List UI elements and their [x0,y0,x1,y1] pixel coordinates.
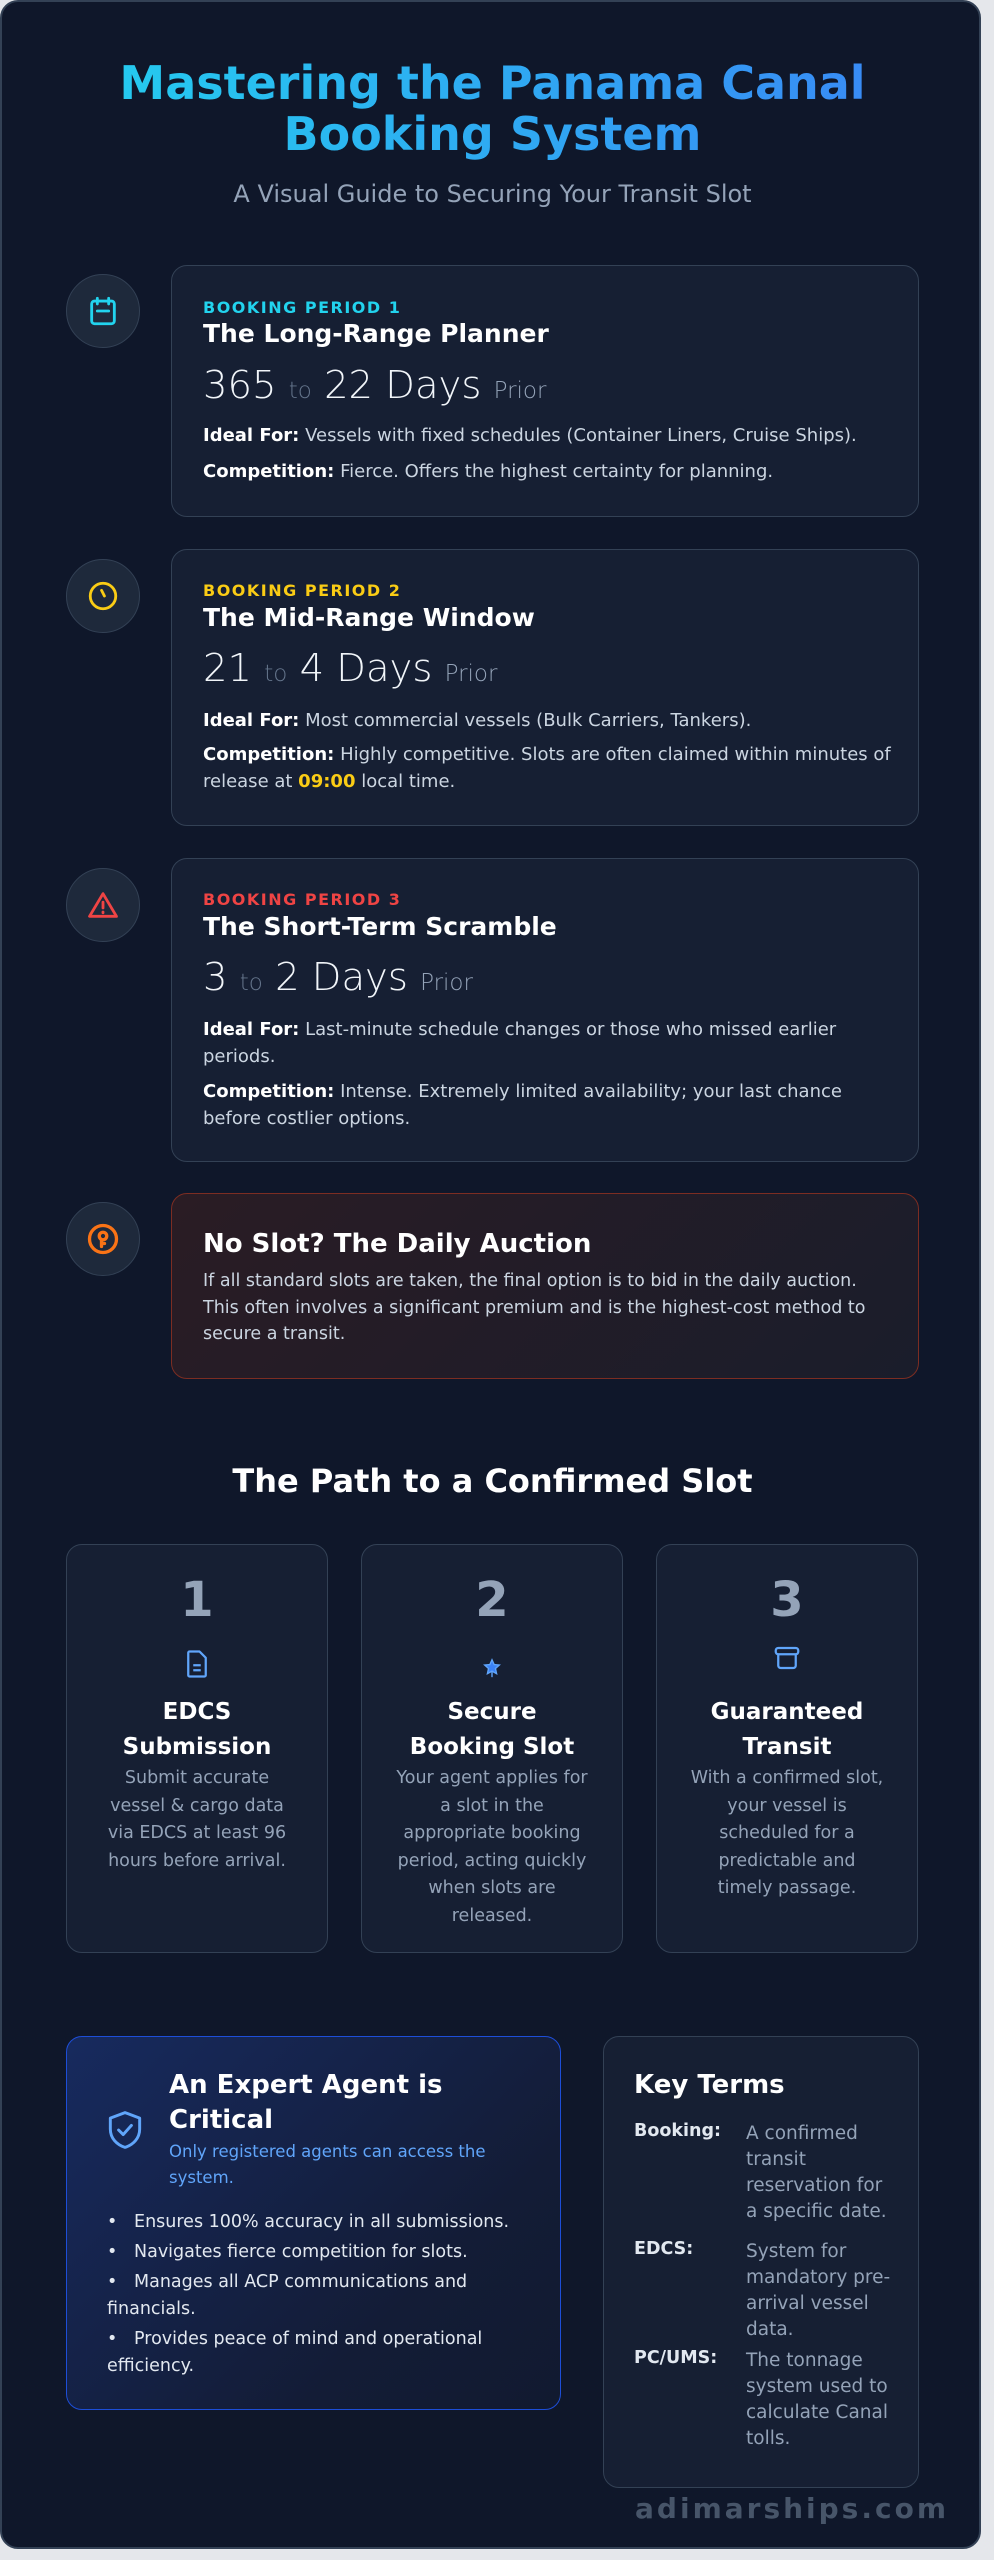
bullet list: • Ensures 100% accuracy in all submissions. [107,2212,509,2232]
term: booking: A confirmed transit reservation for a specific date. [746,2123,887,2222]
step 3: scheduled for a [719,1823,855,1843]
panel: key terms [603,2036,919,2488]
panel: booking period 1: Competition: Fierce. Offers the highest certainty for planning. [203,461,773,482]
step 2: Booking Slot [410,1734,574,1760]
icon: archive [774,1646,800,1670]
term: booking [634,2121,887,2222]
icon: calendar [66,274,140,348]
heading: No Slot? The Daily Auction [203,1229,591,1259]
footer brand: adimarships.com [635,2492,949,2525]
panel: daily auction [171,1193,919,1379]
heading: The Mid-Range Window [203,603,535,632]
panel: booking period 1 [171,265,919,517]
heading [169,2070,443,2135]
step 3: timely passage. [718,1878,856,1898]
step 3 [656,1544,918,1953]
label: BOOKING PERIOD 2 [203,581,401,600]
title: Booking System [284,107,701,161]
icon: star [483,1658,501,1678]
step 2: Your agent applies for a slot in the appropriate booking period, acting quickly when slots are released. [396,1768,588,1926]
step 3: With a confirmed slot, [691,1768,883,1788]
term: edcs: System for mandatory pre-arrival vessel data. [746,2241,890,2340]
step 1: EDCS [163,1699,231,1725]
step 2 [361,1544,623,1953]
days range: 365 to 22 Days Prior [203,363,546,408]
step 3: your vessel is [727,1796,847,1816]
term: edcs: EDCS: [634,2239,693,2259]
icon: clock [66,559,140,633]
panel: expert agent [66,2036,561,2410]
subtitle: A Visual Guide to Securing Your Transit Slot [233,180,752,208]
details: Ideal For: Vessels with fixed schedules (Container Liners, Cruise Ships). [203,425,857,446]
panel: booking period 3 [171,858,919,1162]
heading: An Expert Agent is [169,2070,443,2100]
bullet list: • Navigates fierce competition for slots. [107,2242,468,2262]
label: BOOKING PERIOD 1 [203,298,401,317]
term: booking: Booking: [634,2121,721,2141]
term: pc/ums: PC/UMS: [634,2348,717,2368]
panel: booking period 2: Competition: Highly competitive. Slots are often claimed within minutes of release at 09:00 local time. [203,744,891,792]
step 3: Transit [743,1734,831,1760]
step 3: predictable and [718,1850,856,1870]
term: pc/ums: The tonnage system used to calculate Canal tolls. [746,2350,888,2449]
term: edcs [634,2239,890,2340]
text: If all standard slots are taken, the final option is to bid in the daily auction. This often involves a significant premium and is the highest-cost method to secure a transit. [203,1271,865,1344]
step 3: Guaranteed [711,1699,863,1725]
step 2: Secure [447,1699,537,1725]
term: pc/ums [634,2348,888,2449]
icon: warning [66,868,140,942]
bullet list [107,2212,509,2376]
days range: 3 to 2 Days Prior [203,955,473,1000]
heading: Key Terms [634,2070,785,2100]
step 1: Submission [123,1734,271,1760]
heading: path: The Path to a Confirmed Slot [232,1462,753,1500]
details: Ideal For: Last-minute schedule changes or those who missed earlier periods. [203,1019,836,1067]
subheading: Only registered agents can access the system. [169,2142,486,2187]
label: BOOKING PERIOD 3 [203,890,401,909]
heading: Critical [169,2105,273,2135]
bullet list: • Provides peace of mind and operational efficiency. [107,2329,482,2376]
icon: document [187,1650,207,1678]
step 3: 3 [770,1572,804,1628]
heading: The Long-Range Planner [203,319,549,348]
step 1: Submit accurate vessel & cargo data via EDCS at least 96 hours before arrival. [108,1768,286,1870]
icon: auction [66,1202,140,1276]
step 2: 2 [475,1572,509,1628]
icon: shield [108,2111,142,2149]
panel: booking period 2 [171,549,919,826]
title: Mastering the Panama Canal [119,56,866,110]
title [2,58,983,160]
bullet list: • Manages all ACP communications and financials. [107,2272,467,2319]
days range: 21 to 4 Days Prior [203,646,497,691]
step 1 [66,1544,328,1953]
heading: The Short-Term Scramble [203,912,557,941]
step 1: 1 [180,1572,214,1628]
details: Ideal For: Most commercial vessels (Bulk Carriers, Tankers). [203,710,751,731]
panel: booking period 3: Competition: Intense. Extremely limited availability; your last chance before costlier options. [203,1081,842,1129]
